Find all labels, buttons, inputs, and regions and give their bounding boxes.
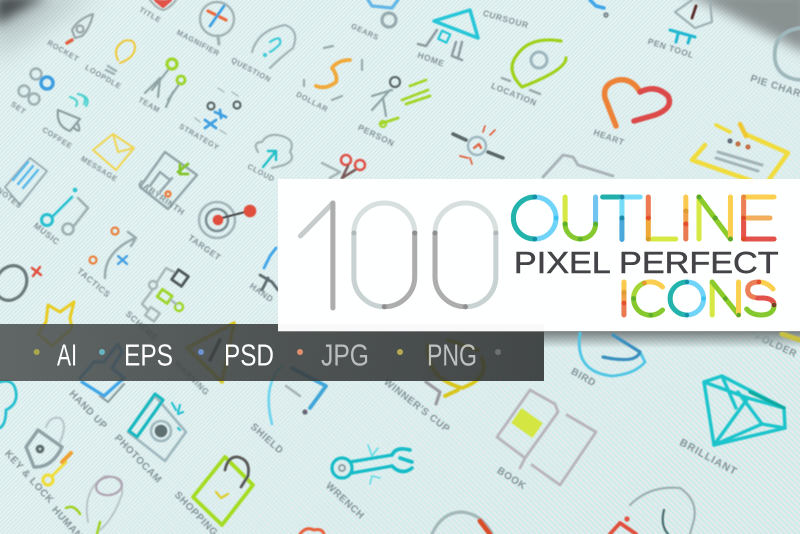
icon: circle with cross xyxy=(0,260,41,306)
icon: folder corner xyxy=(782,334,800,340)
labels: middle area: PERSON xyxy=(356,122,396,148)
icon: gears cluster xyxy=(18,68,53,104)
labels: upper area: DOLLAR xyxy=(295,90,330,114)
format band xyxy=(0,324,544,381)
labels: lower area: BOOK xyxy=(495,465,528,492)
icon: schedule calendar xyxy=(692,124,788,181)
format: PSD xyxy=(198,338,274,372)
icon: scissors xyxy=(322,155,365,178)
icon: document xyxy=(5,158,47,205)
icon: trophy xyxy=(426,340,484,404)
icon: bottom pie xyxy=(432,512,492,534)
labels: upper area: CLOUD xyxy=(246,162,276,184)
labels: middle area: HOME xyxy=(416,50,446,69)
icon: folder xyxy=(543,155,613,177)
heading: ICONS xyxy=(622,280,776,317)
labels: middle area: HAND xyxy=(248,281,276,304)
icon: photocam xyxy=(128,394,186,461)
icon: cloud upload xyxy=(256,135,292,168)
icon: pen tool xyxy=(670,0,712,43)
labels: middle area: LOCATION xyxy=(490,80,539,108)
labels: lower area: WRENCH xyxy=(323,481,366,522)
number 100 xyxy=(300,203,498,309)
labels: upper area: MAGNIFIER xyxy=(175,28,221,58)
icon: home xyxy=(418,10,478,60)
icon: music note xyxy=(42,189,88,234)
format: AI xyxy=(34,338,77,372)
labels: upper area: TITLE xyxy=(138,5,163,25)
icon: team xyxy=(145,59,185,107)
format: EPS xyxy=(99,338,173,372)
band end dot xyxy=(495,349,501,355)
labels: lower area: KEY & LOCK xyxy=(2,449,56,506)
labels: middle area: TACTICS xyxy=(75,266,113,300)
labels: lower area: BIRD xyxy=(569,366,598,389)
labels: middle area: SCHEME xyxy=(124,309,160,343)
icon: book xyxy=(497,390,596,485)
labels: upper area: QUESTION xyxy=(230,55,273,84)
icon: message envelope xyxy=(93,134,134,170)
labels: upper area: STRATEGY xyxy=(177,122,221,152)
icon: coffee cup xyxy=(58,94,88,131)
icon: timer with arrows xyxy=(453,126,503,164)
icon: bulb xyxy=(106,40,135,74)
labels: upper area: COFFEE xyxy=(41,125,74,151)
icon: question head xyxy=(252,25,295,68)
icon: bird xyxy=(579,333,645,376)
icon: person xyxy=(372,77,430,127)
card background xyxy=(278,179,800,332)
labels: lower area: PHOTOCAM xyxy=(112,433,164,486)
labels: upper area xyxy=(0,5,380,210)
icon: hand up xyxy=(80,344,124,402)
icon: target xyxy=(199,202,255,238)
icon: face xyxy=(66,475,123,534)
icon: shopping bag xyxy=(193,457,253,525)
icon: shield xyxy=(269,366,326,424)
icon: hand tool xyxy=(260,248,278,290)
format: JPG xyxy=(297,338,369,372)
icon: lower right fox xyxy=(610,488,695,534)
labels: middle area: CURSOUR xyxy=(482,8,530,30)
format: AI: AI xyxy=(57,338,77,372)
heading: OUTLINE: OUTLINE xyxy=(513,239,518,241)
icon: shield top xyxy=(150,0,176,10)
icon: rocket xyxy=(67,14,93,43)
icon: pie chart xyxy=(775,28,800,80)
band background xyxy=(0,324,544,381)
labels: middle area: MUSIC xyxy=(32,220,62,247)
labels: middle area: WARNING xyxy=(173,358,212,397)
labels: lower area: HAND UP xyxy=(67,389,109,432)
labels: middle area xyxy=(32,8,695,397)
icon: heart xyxy=(605,80,669,126)
icon: magnifier xyxy=(200,2,234,44)
icon: labyrinth xyxy=(140,152,197,209)
icon: dollar xyxy=(304,46,362,100)
labels: upper area: ROCKET xyxy=(46,38,81,64)
labels: middle area: TARGET xyxy=(186,233,223,263)
icon: cloud edge xyxy=(0,381,16,428)
labels: upper area: SET xyxy=(9,100,28,116)
labels: upper area: GEARS xyxy=(350,21,380,42)
icon: strategy xyxy=(195,88,240,134)
labels: lower area: SHIELD xyxy=(248,422,285,457)
heading: OUTLINE xyxy=(513,194,774,242)
title card xyxy=(278,179,800,332)
icon: star xyxy=(38,302,74,346)
labels: lower area: FOLDER xyxy=(753,331,799,360)
labels: lower area: BRILLIANT xyxy=(677,437,740,478)
labels: lower area: WINNER'S CUP xyxy=(381,377,452,435)
format: PSD: PSD xyxy=(224,338,274,372)
format: PNG: PNG xyxy=(427,338,477,372)
labels: upper area: LOOPDLE xyxy=(83,63,123,91)
icon: location xyxy=(502,40,566,94)
icon: warning triangle xyxy=(187,323,234,382)
icon: wrench xyxy=(332,445,412,484)
icon: scheme xyxy=(142,268,188,322)
format: JPG: JPG xyxy=(321,338,369,372)
format: EPS: EPS xyxy=(124,338,173,372)
icon: brilliant diamond xyxy=(704,376,785,445)
heading: PIXEL PERFECT: PIXEL PERFECT xyxy=(514,245,779,280)
labels: middle area: LABYRINTH xyxy=(137,178,187,217)
labels: middle area: HEART xyxy=(592,127,626,147)
icon: bottom flower xyxy=(300,529,324,534)
labels: upper area: MESSAGE xyxy=(79,154,119,184)
labels: middle area: PEN TOOL xyxy=(647,36,695,60)
labels: upper area: TEAM xyxy=(137,95,162,115)
icon: gears top xyxy=(368,0,398,27)
card contents xyxy=(300,194,779,317)
icon: tactics xyxy=(90,228,136,278)
icon: key and lock xyxy=(26,418,71,485)
icon: cursor xyxy=(590,0,607,16)
format: PNG xyxy=(397,338,477,372)
